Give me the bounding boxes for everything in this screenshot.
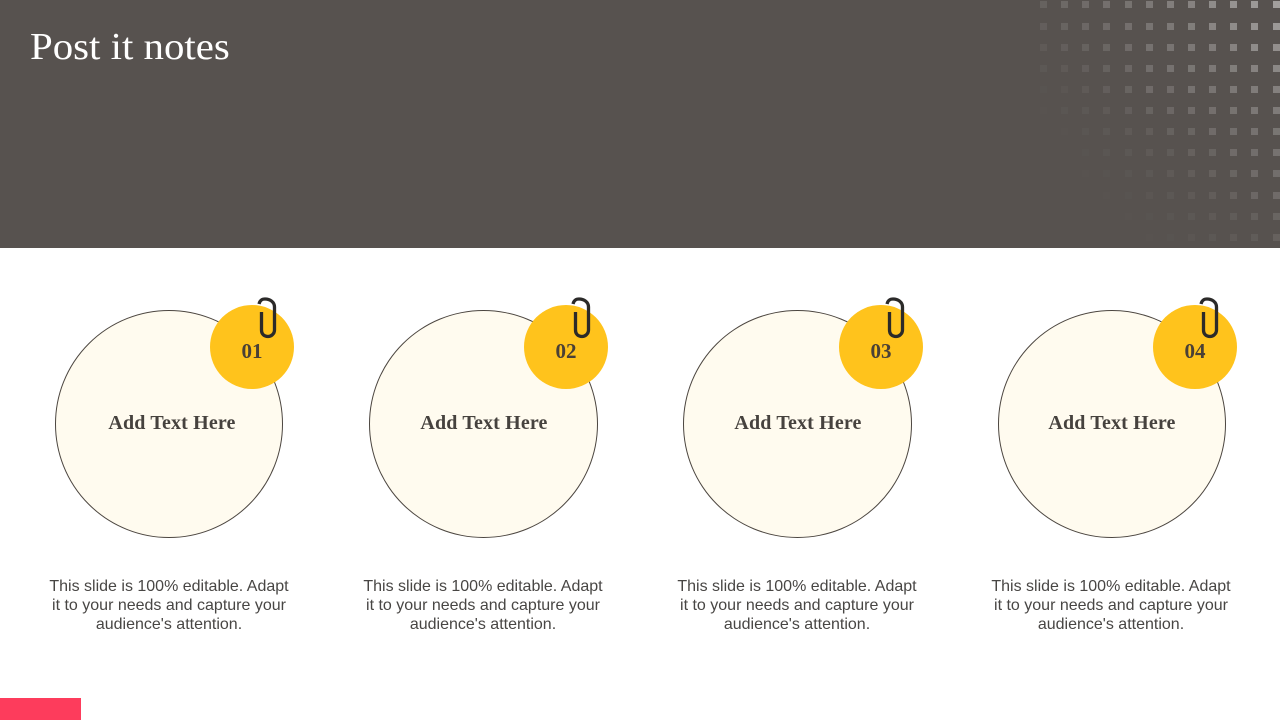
- large circle 2: [369, 310, 598, 538]
- description 1: audience's attention.: [96, 616, 242, 633]
- circle heading 3: Add Text Here: [734, 412, 862, 434]
- description 3: [677, 578, 917, 633]
- large circle 4: [998, 310, 1226, 538]
- yellow badge 1: [210, 305, 294, 389]
- description 4: it to your needs and capture your: [994, 597, 1228, 614]
- note 1: [49, 297, 294, 633]
- description 4: This slide is 100% editable. Adapt: [991, 578, 1231, 595]
- description 2: it to your needs and capture your: [366, 597, 600, 614]
- icon: paperclip 3: [885, 297, 904, 338]
- description 2: [363, 578, 603, 633]
- circle heading 1: Add Text Here: [108, 412, 236, 434]
- yellow badge 2: [524, 305, 608, 389]
- number 04: 04: [1184, 339, 1206, 363]
- large circle 3: [683, 310, 912, 538]
- description 4: [991, 578, 1231, 633]
- note 4: [991, 297, 1237, 633]
- description 1: This slide is 100% editable. Adapt: [49, 578, 289, 595]
- large circle 1: [55, 310, 283, 538]
- title: Post it notes: [30, 26, 230, 68]
- description 3: audience's attention.: [724, 616, 870, 633]
- description 3: it to your needs and capture your: [680, 597, 914, 614]
- note 2: [363, 297, 608, 633]
- number 03: 03: [870, 339, 892, 363]
- header band: [0, 0, 1280, 248]
- description 1: [49, 578, 289, 633]
- icon: paperclip 1: [257, 297, 276, 338]
- number 01: 01: [242, 339, 262, 363]
- icon: paperclip 4: [1199, 297, 1218, 338]
- yellow badge 3: [839, 305, 922, 389]
- description 4: audience's attention.: [1038, 616, 1184, 633]
- note 3: [677, 297, 923, 633]
- yellow badge 4: [1153, 305, 1236, 389]
- description 1: it to your needs and capture your: [52, 597, 286, 614]
- circle heading 4: Add Text Here: [1048, 412, 1176, 434]
- description 2: This slide is 100% editable. Adapt: [363, 578, 603, 595]
- description 2: audience's attention.: [410, 616, 556, 633]
- description 3: This slide is 100% editable. Adapt: [677, 578, 917, 595]
- number 02: 02: [556, 339, 576, 363]
- red accent bar: [0, 698, 81, 720]
- dot pattern: [1040, 1, 1280, 241]
- icon: paperclip 2: [571, 297, 590, 338]
- circle heading 2: Add Text Here: [420, 412, 548, 434]
